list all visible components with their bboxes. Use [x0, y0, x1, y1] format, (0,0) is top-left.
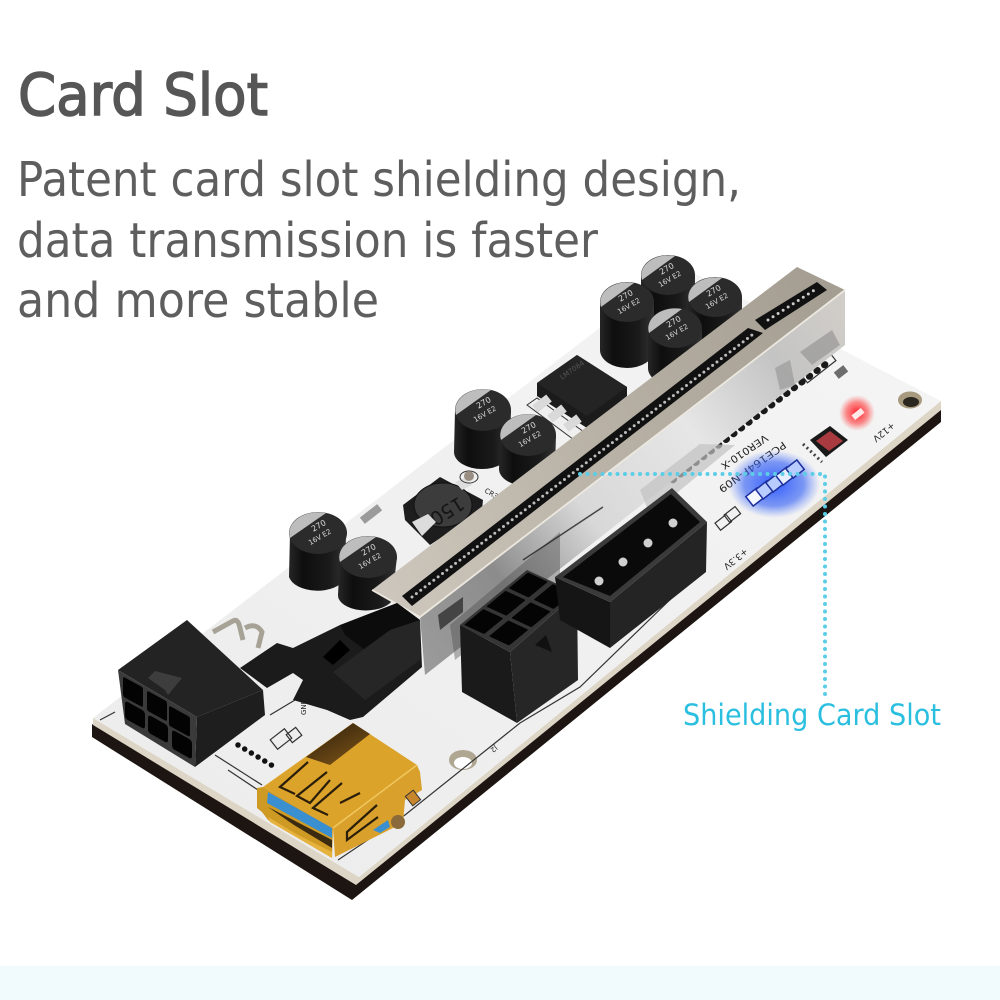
bottom pale band: [0, 966, 1000, 1000]
USB top ridge: [333, 765, 417, 828]
mounting hole right: [898, 392, 922, 408]
USB scorched mark: [306, 723, 370, 765]
capacitor: [289, 512, 347, 591]
diode: [460, 471, 499, 501]
mounting hole left: [449, 750, 477, 770]
USB top shell: [263, 723, 417, 828]
capacitor: 270: [475, 395, 493, 411]
main slot opening: [402, 328, 763, 606]
connector front: [118, 670, 197, 767]
chip with red cap: [803, 426, 848, 462]
capacitor: 270: [705, 283, 723, 299]
USB blue side: [373, 820, 390, 833]
USB spring tabs: [280, 762, 360, 815]
line two: data transmission is faster: [17, 213, 598, 269]
silkscreen labels: +12V: [870, 420, 896, 444]
short slot pins: [768, 289, 816, 320]
USB 3.0 gold port: [257, 723, 422, 858]
diode: CR3: [483, 487, 499, 501]
capacitor: [600, 282, 654, 368]
resistor pads: [360, 365, 848, 524]
board cream edge: [93, 401, 941, 885]
wall reflections: [438, 330, 840, 660]
silkscreen labels: VER010-X: [718, 432, 769, 471]
silkscreen labels: +3.3V: [720, 546, 749, 571]
capacitor: [499, 414, 556, 486]
icon: blue status LEDs: [728, 450, 820, 518]
silkscreen labels: J2: [489, 743, 500, 754]
silver bracket pin behind left connector: [213, 620, 262, 648]
capacitor: 16V E2: [664, 323, 690, 342]
pin holes: [123, 676, 192, 760]
connector: six-pin center: [460, 570, 578, 723]
USB solder ring: [391, 815, 405, 829]
connector right face: [510, 593, 578, 723]
capacitor: 270: [310, 518, 328, 534]
USB opening: [268, 807, 332, 848]
title: Card Slot: [18, 61, 268, 129]
inductor: [403, 477, 483, 545]
board dark edge: [92, 409, 941, 900]
capacitor: 16V E2: [357, 552, 383, 571]
latch: [148, 671, 182, 695]
slot contact pins: [412, 335, 752, 597]
connector: four-pin molex: [555, 488, 707, 648]
top face highlight: [372, 290, 845, 617]
silkscreen labels: GND: [300, 699, 308, 715]
silkscreen lines: [100, 351, 836, 860]
connector left face: [460, 625, 517, 723]
capacitor: 16V E2: [657, 270, 683, 289]
connector top: [118, 620, 263, 717]
capacitor rear group: [600, 255, 742, 386]
molex left face: [555, 577, 610, 648]
solder dots along bracket: [673, 363, 827, 480]
capacitor: 270: [665, 314, 683, 330]
capacitor: [454, 389, 511, 469]
silkscreen labels: [300, 420, 896, 754]
USB pad: [405, 790, 421, 806]
molex right face: [610, 522, 707, 648]
connector top: [460, 570, 577, 652]
panel: riser board: [92, 266, 941, 900]
molex rim: [555, 488, 707, 602]
callout leader line: [580, 474, 825, 695]
panel: shielded metal card slot: [372, 267, 845, 675]
capacitor: 16V E2: [307, 528, 333, 547]
capacitor: 270: [520, 420, 538, 436]
capacitor: 270: [360, 542, 378, 558]
line three: and more stable: [17, 273, 379, 329]
pin holes: [464, 573, 573, 645]
pin row solder dots left: [238, 745, 273, 766]
USB right shell: [333, 765, 422, 857]
metal top face: [372, 267, 845, 617]
USB side slots: [347, 805, 378, 840]
board surface: [93, 266, 941, 877]
metal front wall: [420, 290, 845, 675]
capacitor: [641, 255, 695, 338]
molex well: [563, 494, 700, 596]
capacitor: [338, 536, 397, 610]
black bracket clip: [240, 603, 422, 720]
USB lower lip: [268, 817, 332, 858]
capacitor: 16V E2: [704, 292, 730, 311]
capacitor: 16V E2: [472, 405, 498, 424]
capacitor: 270: [617, 288, 635, 304]
USB front shell: [257, 787, 333, 858]
callout label: Shielding Card Slot: [683, 698, 941, 732]
short slot opening: [755, 282, 827, 330]
line one: Patent card slot shielding design,: [17, 152, 741, 208]
inductor: 150: [426, 492, 468, 530]
capacitor: 16V E2: [616, 297, 642, 316]
molex pins: [594, 518, 678, 586]
silkscreen labels: PCE164P-N09: [716, 439, 788, 494]
description text: [17, 152, 741, 329]
connector side: [195, 690, 265, 767]
MOSFET regulator: [527, 355, 627, 448]
capacitor: 270: [658, 261, 676, 277]
icon: red power LED: [839, 395, 875, 431]
capacitor middle group: [289, 389, 556, 610]
connector: six-pin left: [118, 620, 265, 767]
capacitor: [648, 308, 702, 386]
MOSFET regulator: LM7084: [559, 359, 586, 382]
capacitor: [688, 277, 742, 355]
latch mark: [535, 635, 552, 652]
USB blue tongue: [267, 792, 332, 838]
capacitor: 16V E2: [517, 430, 543, 449]
